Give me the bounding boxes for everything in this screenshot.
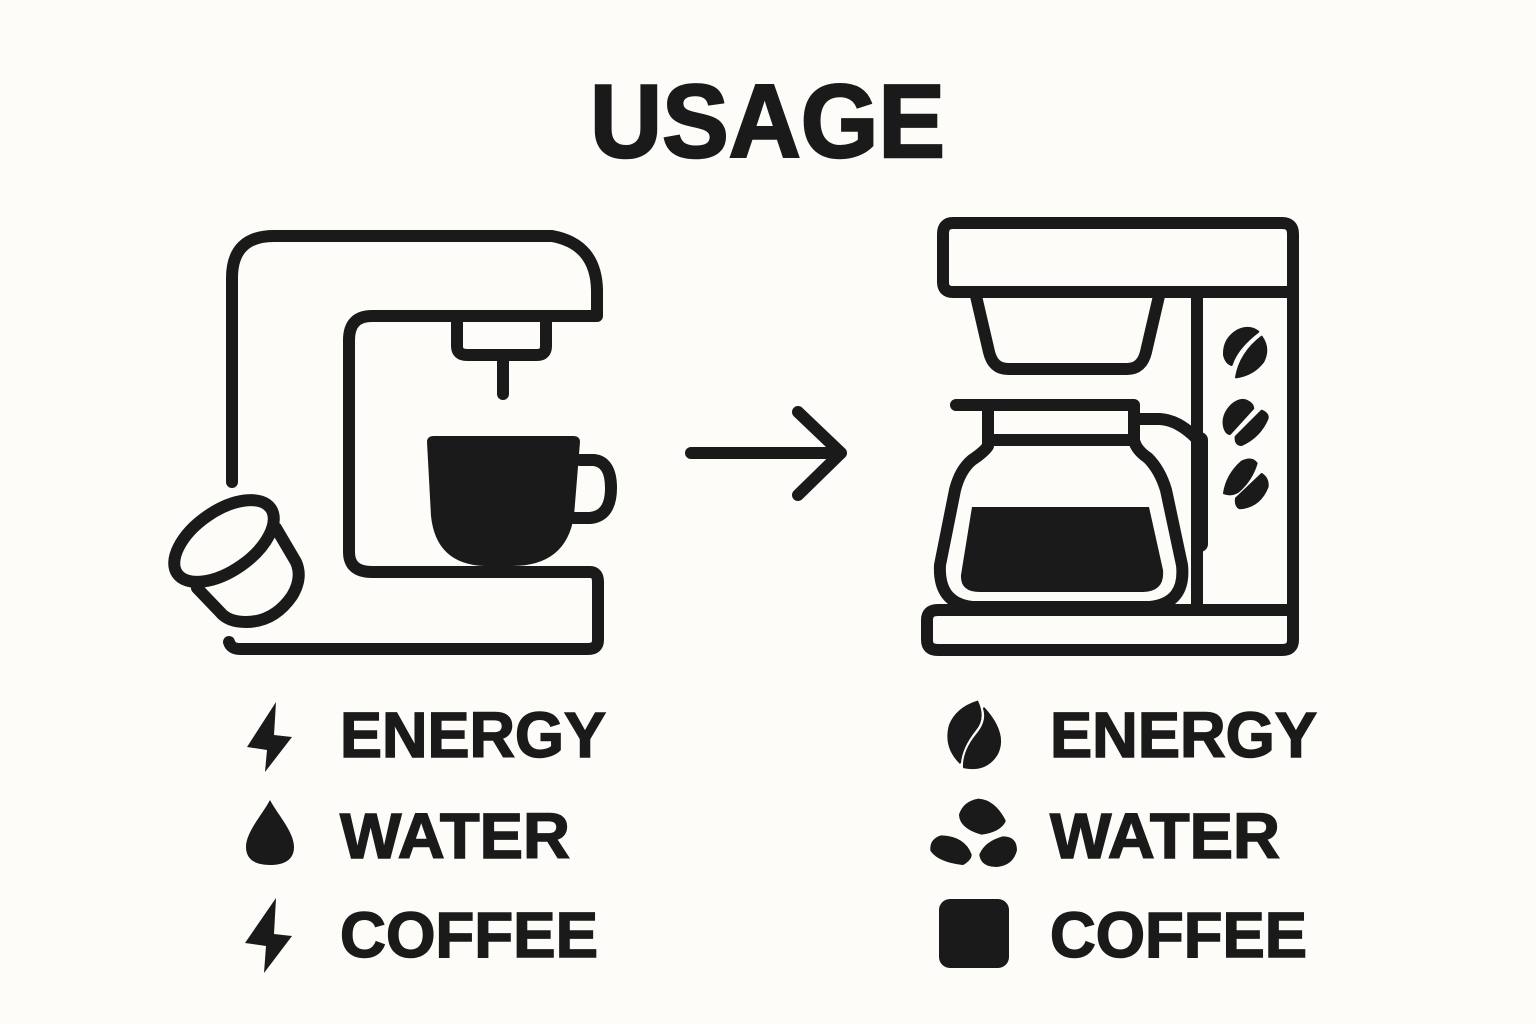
left legend: energy: ENERGY — [340, 699, 606, 771]
coffee cup — [427, 436, 611, 566]
side panel divider — [1197, 296, 1200, 606]
arrow — [691, 412, 841, 495]
right legend: water — [933, 800, 1280, 872]
coffee capsule — [160, 484, 299, 622]
carafe — [940, 405, 1196, 607]
icon: drip coffee maker — [927, 223, 1293, 650]
icon: capsule coffee machine — [160, 236, 611, 649]
left legend: coffee: COFFEE — [340, 899, 598, 971]
left legend: water: WATER — [340, 800, 570, 872]
top housing and frame — [927, 223, 1293, 650]
right legend: water: WATER — [1050, 800, 1280, 872]
dispenser spout — [457, 320, 546, 394]
right legend: coffee — [939, 899, 1307, 971]
filter basket — [976, 296, 1159, 369]
title: USAGE — [590, 64, 945, 180]
right legend: coffee: COFFEE — [1050, 899, 1307, 971]
icons: beans on panel — [1224, 328, 1268, 508]
left legend: coffee — [245, 898, 598, 973]
machine body — [229, 236, 598, 649]
right legend: energy: ENERGY — [1050, 699, 1317, 771]
left legend: water — [246, 800, 570, 872]
